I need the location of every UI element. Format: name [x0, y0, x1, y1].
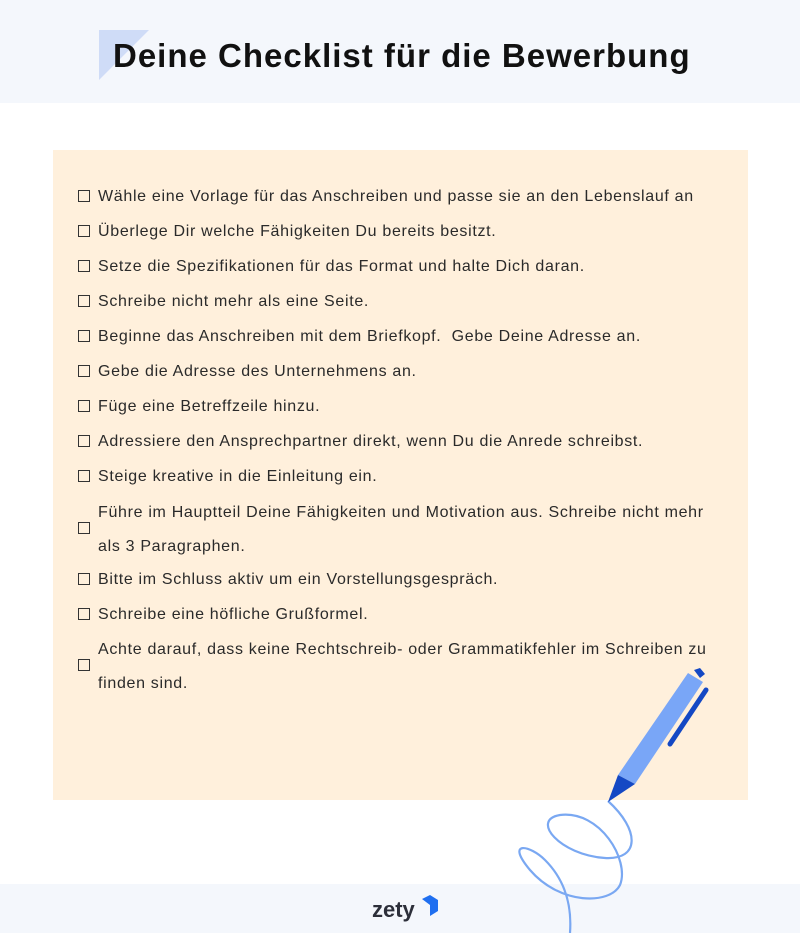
logo: zety — [372, 895, 438, 922]
checklist items: Wähle eine Vorlage für das Anschreiben und passe sie an den Lebenslauf an — [98, 188, 694, 205]
logo: zety: zety — [372, 897, 415, 922]
checklist items: Adressiere den Ansprechpartner direkt, wenn Du die Anrede schreibst. — [98, 433, 643, 450]
checklist items: Schreibe nicht mehr als eine Seite. — [98, 293, 369, 310]
checklist items: Steige kreative in die Einleitung ein. — [98, 468, 377, 485]
checklist items: Gebe die Adresse des Unternehmens an. — [98, 363, 417, 380]
panel: checklist — [53, 150, 748, 800]
checklist items: Schreibe eine höfliche Grußformel. — [98, 606, 368, 623]
checklist items: Setze die Spezifikationen für das Format und halte Dich daran. — [98, 258, 585, 275]
checklist items: finden sind. — [98, 675, 188, 692]
checklist items: Achte darauf, dass keine Rechtschreib- oder Grammatikfehler im Schreiben zu — [98, 641, 707, 658]
checklist items: als 3 Paragraphen. — [98, 538, 245, 555]
footer band — [0, 884, 800, 933]
checklist items: Führe im Hauptteil Deine Fähigkeiten und Motivation aus. Schreibe nicht mehr — [98, 504, 704, 521]
checklist items: Bitte im Schluss aktiv um ein Vorstellungsgespräch. — [98, 571, 498, 588]
header band — [0, 0, 800, 103]
checklist items: Füge eine Betreffzeile hinzu. — [98, 398, 320, 415]
title: Deine Checklist für die Bewerbung — [113, 37, 691, 74]
checklist items: Überlege Dir welche Fähigkeiten Du bereits besitzt. — [98, 223, 496, 240]
checklist items: Beginne das Anschreiben mit dem Briefkopf. Gebe Deine Adresse an. — [98, 328, 641, 345]
title accent triangle — [99, 30, 149, 80]
